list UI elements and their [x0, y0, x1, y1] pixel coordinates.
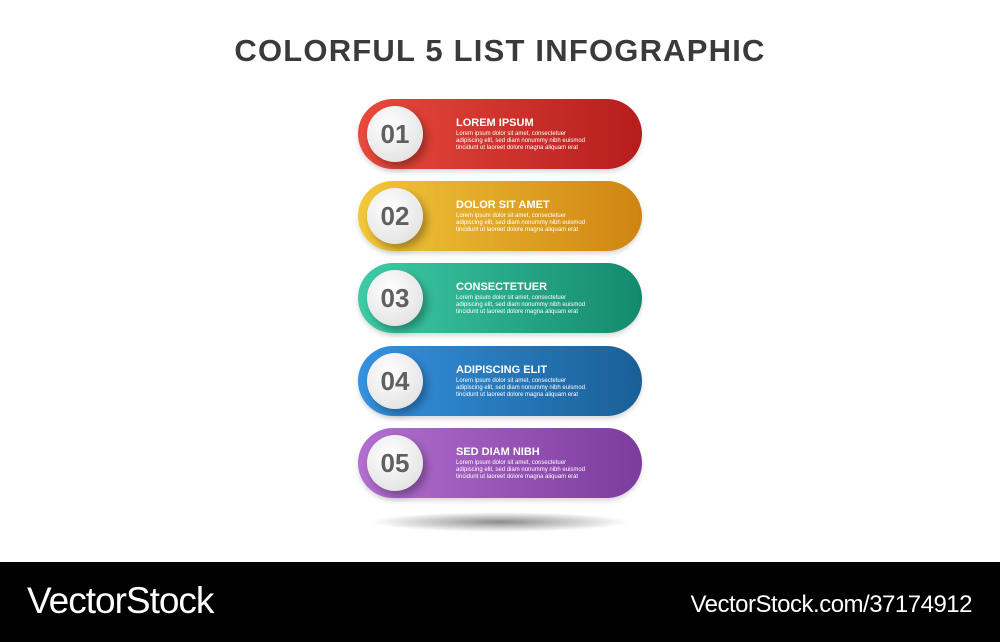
badge 01 — [367, 106, 423, 162]
floor shadow — [370, 512, 630, 532]
badge 03 — [367, 270, 423, 326]
text 02: adipiscing elit, sed diam nonummy nibh euismod — [456, 220, 585, 226]
text 03 — [456, 294, 585, 315]
text 02 — [456, 212, 585, 233]
badge 02: 02 — [381, 201, 409, 231]
title: COLORFUL 5 LIST INFOGRAPHIC — [234, 33, 766, 68]
badge 05: 05 — [381, 448, 409, 478]
heading 04: ADIPISCING ELIT — [456, 364, 547, 376]
text 01: adipiscing elit, sed diam nonummy nibh euismod — [456, 138, 585, 144]
badge 03: 03 — [381, 283, 409, 313]
text 04 — [456, 378, 585, 398]
heading 01: LOREM IPSUM — [456, 117, 534, 129]
item 02 — [358, 181, 642, 251]
footer — [0, 562, 1000, 642]
heading 03: CONSECTETUER — [456, 281, 547, 293]
badge 01: 01 — [381, 119, 409, 149]
text 01: tincidunt ut laoreet dolore magna aliquam erat — [456, 145, 578, 151]
text 02: Lorem ipsum dolor sit amet, consectetuer — [456, 213, 566, 219]
footer logo: VectorStock — [27, 580, 213, 621]
text 05 — [456, 460, 585, 480]
item 04 — [358, 346, 642, 416]
badge 02 — [367, 188, 423, 244]
text 03: Lorem ipsum dolor sit amet, consectetuer — [456, 295, 566, 301]
item 03 — [358, 263, 642, 333]
text 01 — [456, 130, 585, 151]
heading 05: SED DIAM NIBH — [456, 446, 540, 458]
text 05: Lorem ipsum dolor sit amet, consectetuer — [456, 460, 566, 466]
badge 04 — [367, 353, 423, 409]
item 05 — [358, 428, 642, 498]
text 05: adipiscing elit, sed diam nonummy nibh euismod — [456, 467, 585, 473]
text 03: adipiscing elit, sed diam nonummy nibh euismod — [456, 302, 585, 308]
badge 04: 04 — [381, 366, 409, 396]
heading 02: DOLOR SIT AMET — [456, 199, 550, 211]
text 05: tincidunt ut laoreet dolore magna aliquam erat — [456, 474, 578, 480]
text 03: tincidunt ut laoreet dolore magna aliquam erat — [456, 309, 578, 315]
item 01 — [358, 99, 642, 169]
text 02: tincidunt ut laoreet dolore magna aliquam erat — [456, 227, 578, 233]
text 04: Lorem ipsum dolor sit amet, consectetuer — [456, 378, 566, 384]
text 04: tincidunt ut laoreet dolore magna aliquam erat — [456, 392, 578, 398]
text 01: Lorem ipsum dolor sit amet, consectetuer — [456, 131, 566, 137]
footer url: VectorStock.com/37174912 — [690, 591, 972, 618]
badge 05 — [367, 435, 423, 491]
text 04: adipiscing elit, sed diam nonummy nibh euismod — [456, 385, 585, 391]
